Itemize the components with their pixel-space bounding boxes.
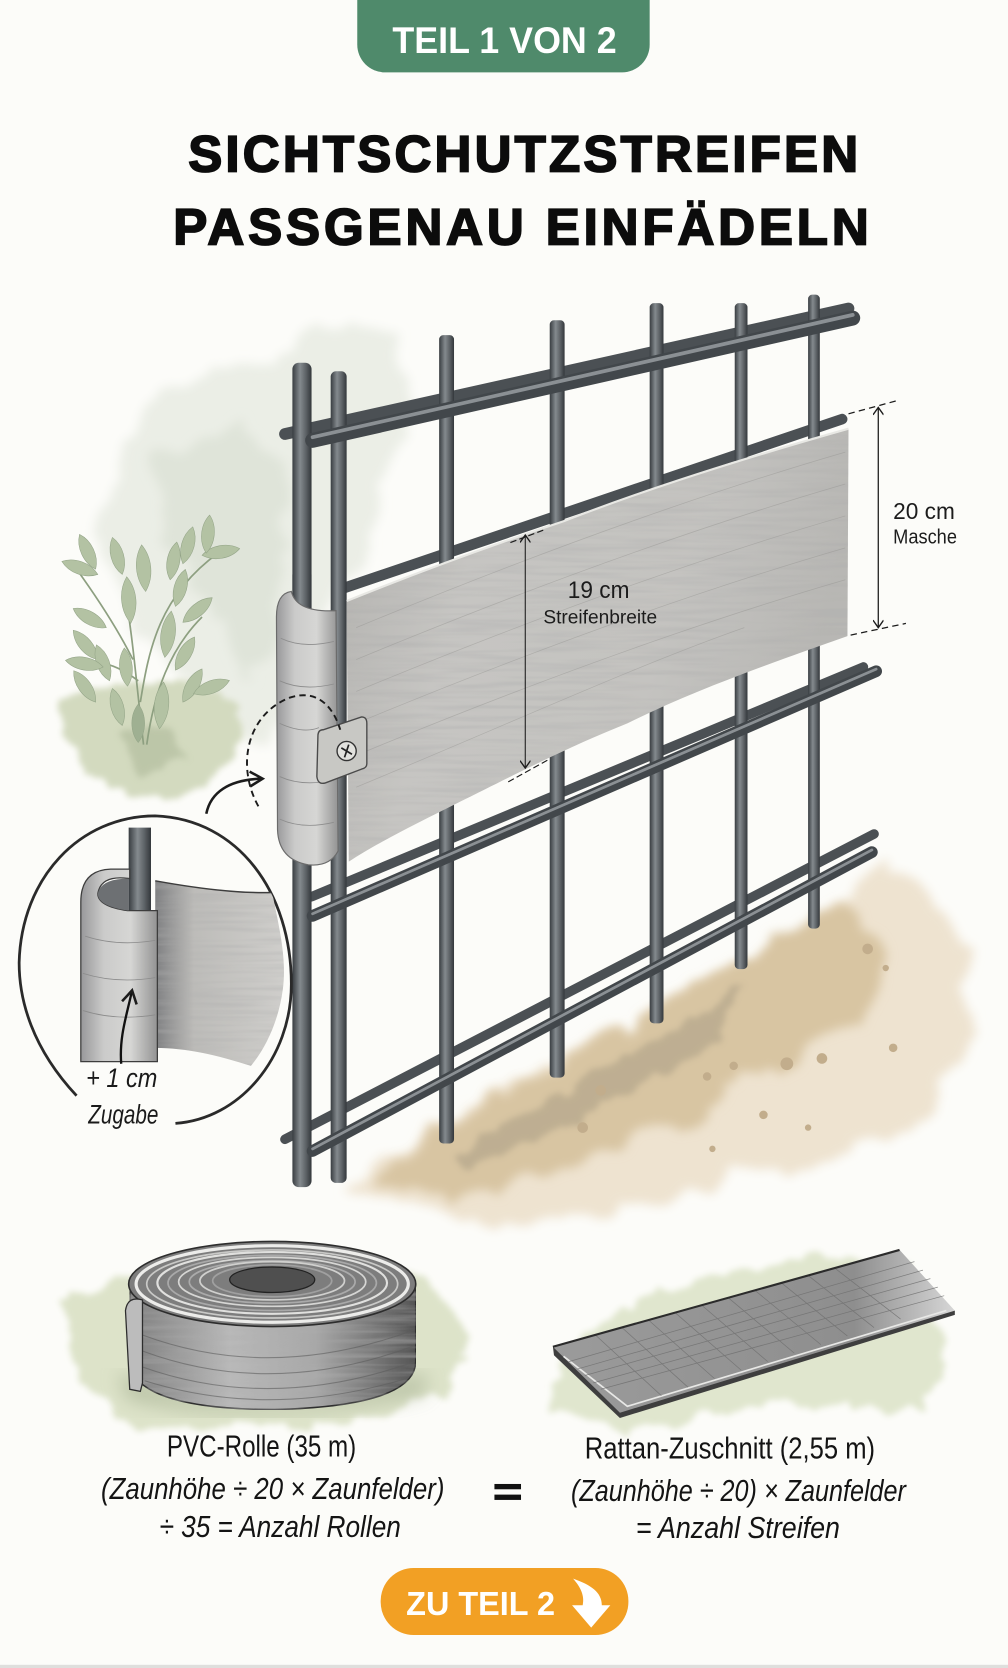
label: PVC formula: PVC-Rolle (35 m)	[167, 1428, 356, 1463]
inset: up arrow	[121, 991, 132, 1064]
equals sign	[494, 1484, 521, 1500]
metal clip with screw	[317, 717, 367, 783]
badge: part 1 of 2: TEIL 1 VON 2	[392, 19, 617, 61]
detail inset	[19, 816, 291, 1129]
illustration: plant	[60, 514, 241, 798]
badge: part 1 of 2	[357, 0, 650, 72]
inset: label: Zugabe	[87, 1099, 158, 1129]
label: PVC formula	[101, 1428, 444, 1544]
privacy strip	[347, 429, 849, 862]
dimension: 20 cm mesh: 20 cm	[893, 498, 955, 524]
fence: vertical bars	[292, 295, 820, 1187]
dashed detail marker	[247, 695, 340, 806]
label: rattan formula: Rattan-Zuschnitt (2,55 m)	[585, 1430, 875, 1465]
inset: label	[86, 1063, 158, 1129]
soil: specks	[577, 944, 897, 1152]
fence	[285, 295, 876, 1187]
inset: rod and wrap	[129, 828, 151, 913]
inset: label: + 1 cm	[86, 1063, 157, 1093]
dimension: 20 cm mesh	[849, 400, 957, 635]
fence: back rails	[285, 308, 874, 1139]
label: PVC formula: (Zaunhöhe ÷ 20 × Zaunfelder)	[101, 1471, 444, 1506]
title: PASSGENAU EINFÄDELN	[173, 199, 869, 256]
illustration: rattan cut strip	[548, 1250, 955, 1431]
label: rattan formula	[571, 1430, 907, 1545]
rattan: weave grid	[569, 1262, 944, 1396]
button: to part 2: ZU TEIL 2	[406, 1585, 555, 1622]
inset: strip	[155, 881, 284, 1066]
inset: circle outline	[19, 816, 291, 1123]
strip: weave lines	[356, 452, 845, 787]
illustration: PVC roll	[64, 1241, 473, 1425]
title	[173, 125, 869, 256]
dimension: 20 cm mesh: Masche	[893, 527, 957, 549]
label: rattan formula: = Anzahl Streifen	[636, 1510, 840, 1545]
strip wrap around the post	[276, 574, 338, 865]
icon: down arrow	[572, 1579, 610, 1628]
label: PVC formula: ÷ 35 = Anzahl Rollen	[159, 1509, 401, 1544]
watercolor wash: soil	[346, 864, 976, 1221]
arrow to detail	[206, 779, 262, 814]
fence: front rails	[313, 315, 876, 1151]
watercolor wash: foliage behind fence	[98, 319, 417, 745]
dimension: 19 cm strip width: Streifenbreite	[543, 607, 657, 628]
dimension: 19 cm strip width	[508, 530, 657, 782]
title: SICHTSCHUTZSTREIFEN	[188, 125, 858, 182]
label: rattan formula: (Zaunhöhe ÷ 20) × Zaunfelder	[571, 1473, 907, 1508]
dimension: 19 cm strip width: 19 cm	[568, 577, 629, 604]
button: to part 2	[381, 1568, 628, 1635]
